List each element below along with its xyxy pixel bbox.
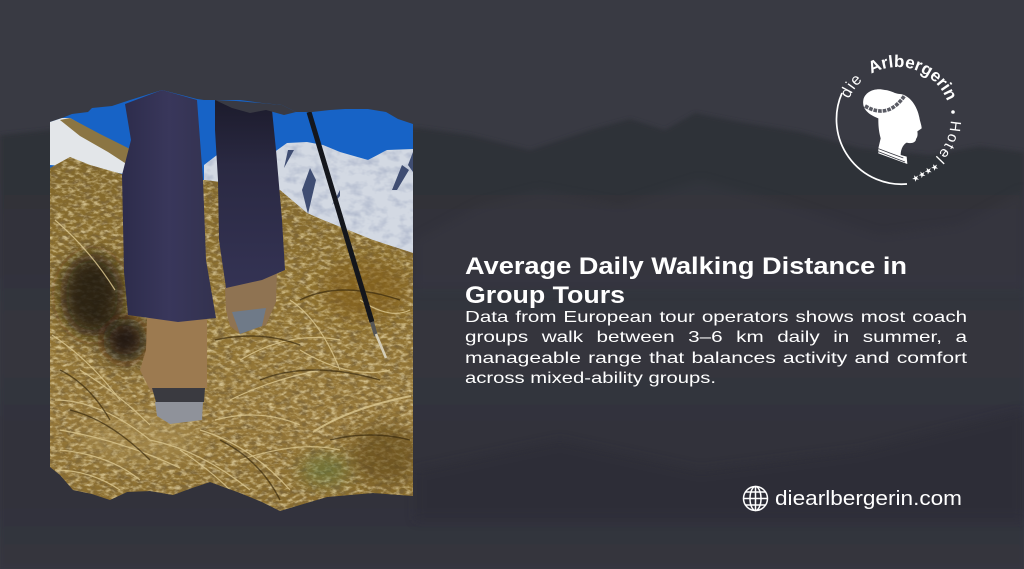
body text: manageable range that balances activity and comfort — [465, 350, 968, 367]
photo: hiker on alpine grass slope — [50, 88, 419, 511]
torn paper edge over photo top — [215, 100, 296, 115]
website link — [744, 486, 962, 510]
snowy rock peaks — [204, 140, 414, 258]
logo hotel label: Hotel — [936, 122, 962, 164]
left boot — [140, 318, 207, 424]
grass blades — [52, 220, 411, 490]
logo stars: ★★★★ — [910, 161, 941, 184]
logo separator dot — [951, 110, 955, 114]
left trouser leg — [122, 90, 216, 322]
heading: Average Daily Walking Distance in — [465, 253, 907, 280]
logo ring — [836, 93, 907, 184]
website address: diearlbergerin.com — [775, 488, 962, 510]
logo name: Arlbergerin — [870, 54, 954, 100]
icon: globe — [744, 486, 768, 510]
heading: Group Tours — [465, 282, 625, 309]
body text — [465, 309, 968, 387]
sky — [50, 90, 413, 180]
left snowy hillside — [50, 118, 132, 174]
trekking pole — [309, 112, 386, 358]
logo: die Arlbergerin Hotel — [836, 54, 962, 186]
logo lettering: die — [842, 76, 861, 98]
right trouser leg — [215, 100, 285, 288]
body text: groups walk between 3–6 km daily in summer, a — [465, 329, 967, 346]
body text: Data from European tour operators shows most coach — [465, 309, 967, 326]
grass field — [50, 150, 419, 511]
right boot — [225, 270, 277, 334]
heading — [465, 253, 907, 309]
logo portrait silhouette — [863, 89, 922, 164]
body text: across mixed-ability groups. — [465, 370, 716, 387]
